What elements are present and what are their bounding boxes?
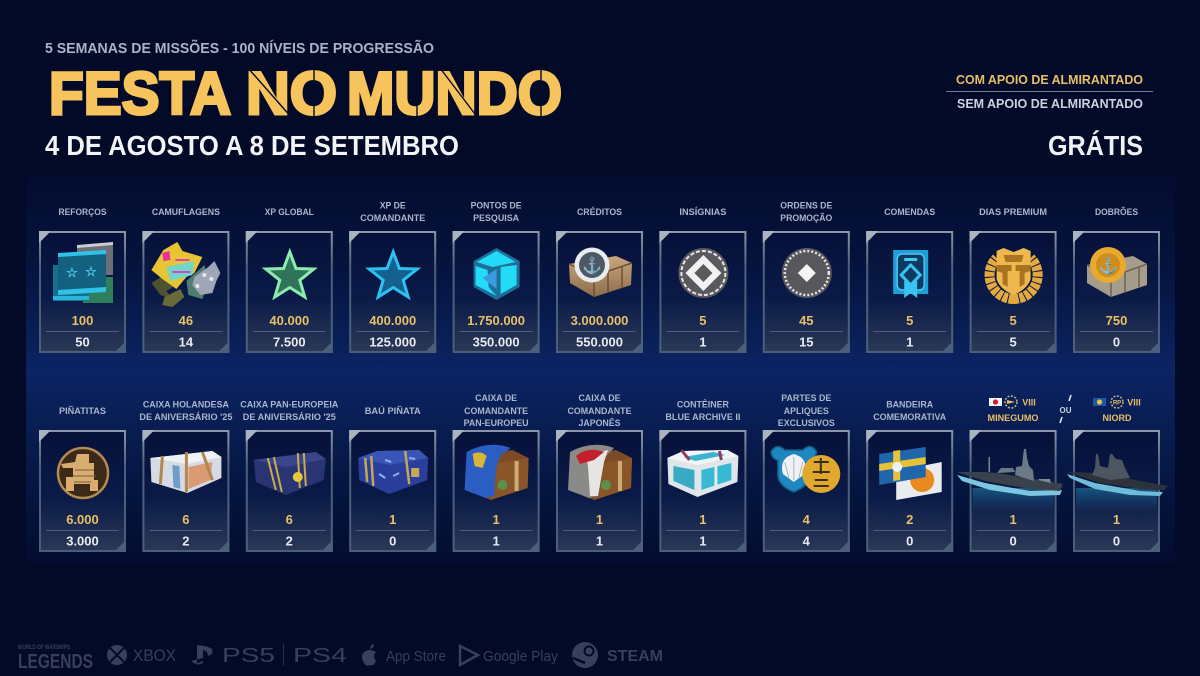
ship: minegumo <box>957 449 1063 496</box>
card: xp de comandante <box>349 201 436 353</box>
card: partes de apliques exclusivos: 4 <box>803 534 811 548</box>
icon: crate with doubloon: ⚓ <box>1098 256 1118 275</box>
card: créditos: 550.000 <box>576 334 623 350</box>
separator: ou: OU <box>1060 406 1072 415</box>
card: comendas: COMENDAS <box>884 207 935 218</box>
header: niord: NIORD <box>1102 413 1132 424</box>
icon: emblem shield and gold patch <box>771 446 840 493</box>
card: xp de comandante: 400.000 <box>369 313 416 328</box>
card: baú piñata <box>349 405 436 552</box>
icon: crate with doubloon <box>1087 247 1147 297</box>
separator: ou <box>1060 395 1072 423</box>
card: ordens de promoção: ORDENS DE <box>780 201 832 212</box>
header: minegumo <box>988 396 1038 424</box>
card: caixa de comandante pan-europeu: CAIXA DE <box>475 393 517 404</box>
card: minegumo: 1 <box>1009 512 1017 527</box>
logo: playstation 5: PS5 <box>222 645 275 667</box>
icon: premium laurel shield <box>990 248 1038 299</box>
card: dias premium <box>970 207 1057 353</box>
card: contêiner blue archive: BLUE ARCHIVE II <box>665 412 740 423</box>
card: reforços: REFORÇOS <box>58 207 106 218</box>
card: pontos de pesquisa: 350.000 <box>473 334 520 350</box>
card: ordens de promoção: 15 <box>799 334 814 350</box>
card: caixa de comandante japonês: COMANDANTE <box>568 406 632 417</box>
card: caixa pan-europeia: 2 <box>286 534 293 548</box>
icon: blue star <box>369 252 417 297</box>
card: camuflagens: 14 <box>179 334 194 350</box>
icon: order medal <box>782 248 832 298</box>
card: minegumo <box>970 430 1057 552</box>
icon: commander chest with blue cloth <box>465 445 529 500</box>
card: dobrões <box>1073 207 1160 353</box>
icon: blue anniversary box <box>254 452 326 495</box>
card: caixa holandesa <box>139 400 233 552</box>
card: insígnias: INSÍGNIAS <box>679 207 726 218</box>
card: baú piñata: BAÚ PIÑATA <box>365 405 421 417</box>
logo: xbox: XBOX <box>133 646 176 665</box>
card: baú piñata: 0 <box>389 534 396 548</box>
card: reforços <box>39 207 126 353</box>
icon: camouflage patches <box>151 242 220 307</box>
logo: app store: App Store <box>386 648 446 665</box>
logo: steam <box>572 642 663 668</box>
card: caixa de comandante pan-europeu: PAN-EUROPEU <box>464 418 529 429</box>
card: caixa holandesa: 6 <box>182 512 190 527</box>
card: piñatitas: 6.000 <box>66 512 99 527</box>
legend: without admiral support: SEM APOIO DE ALMIRANTADO <box>957 96 1143 111</box>
logo: world of warships legends: LEGENDS <box>18 651 93 673</box>
card: pontos de pesquisa <box>453 201 540 353</box>
icon: commendation document <box>893 250 928 298</box>
card: caixa holandesa: DE ANIVERSÁRIO '25 <box>139 412 233 423</box>
icon: piñata chest <box>358 450 428 494</box>
card: baú piñata: 1 <box>389 512 396 527</box>
logo: google play <box>460 646 558 665</box>
background band <box>26 175 1175 565</box>
title <box>49 60 562 127</box>
header: niord: VIII <box>1127 398 1141 408</box>
logo: world of warships legends: WORLD OF WARSHIPS <box>18 645 70 651</box>
card: xp global <box>246 207 333 353</box>
card: bandeira comemorativa: 0 <box>906 534 913 548</box>
card: bandeira comemorativa: BANDEIRA <box>886 400 933 411</box>
icon: signal flags: ☆ <box>66 265 78 280</box>
icon: wooden crate with credit coin: ⚓ <box>582 256 602 275</box>
title: NO <box>246 60 337 127</box>
card: dobrões: DOBRÕES <box>1095 207 1138 218</box>
icon: piñata coin <box>58 448 108 498</box>
card: caixa de comandante pan-europeu: 1 <box>492 512 500 527</box>
card: dias premium: 5 <box>1009 313 1017 328</box>
card: minegumo: 0 <box>1009 534 1017 548</box>
ship: niord <box>1067 454 1168 496</box>
card: niord <box>1073 430 1160 552</box>
card: dobrões: 750 <box>1106 313 1127 328</box>
header: niord: RP <box>1113 400 1121 406</box>
card: caixa de comandante japonês: 1 <box>596 534 603 548</box>
card: caixa holandesa: 2 <box>182 534 190 548</box>
card: niord: 1 <box>1113 512 1120 527</box>
card: reforços: 50 <box>75 334 90 350</box>
card: contêiner blue archive: CONTÊINER <box>677 399 729 411</box>
footer: logos <box>18 642 663 673</box>
icon: signal flags: ☆ <box>85 264 97 279</box>
card: xp de comandante: XP DE <box>380 201 406 212</box>
card: caixa de comandante japonês: JAPONÊS <box>578 417 620 429</box>
card: caixa de comandante japonês: 1 <box>596 512 603 527</box>
card: caixa pan-europeia: 6 <box>286 512 293 527</box>
title: MUNDO <box>347 60 562 127</box>
card: contêiner blue archive: 1 <box>699 534 707 548</box>
card: dias premium: 5 <box>1009 334 1017 350</box>
card: xp global: 40.000 <box>269 313 309 328</box>
icon: research hexagon <box>474 248 520 300</box>
logo: playstation 4: PS4 <box>293 645 347 667</box>
legend: free: GRÁTIS <box>1048 130 1143 161</box>
card: comendas <box>866 207 953 353</box>
card: caixa de comandante japonês: CAIXA DE <box>578 393 620 404</box>
card: pontos de pesquisa: PONTOS DE <box>471 201 522 212</box>
card: créditos: 3.000.000 <box>571 313 628 328</box>
icon: white and cyan container <box>667 450 738 497</box>
header: minegumo: VIII <box>1022 398 1036 408</box>
card: partes de apliques exclusivos <box>763 393 850 552</box>
card: dobrões: 0 <box>1113 334 1120 350</box>
card: pontos de pesquisa: PESQUISA <box>473 213 519 224</box>
logo: world of warships legends <box>18 645 93 673</box>
card: partes de apliques exclusivos: APLIQUES <box>784 406 829 417</box>
card: ordens de promoção <box>763 201 850 353</box>
card: caixa pan-europeia: DE ANIVERSÁRIO '25 <box>243 412 336 423</box>
card: bandeira comemorativa <box>866 400 953 552</box>
icon: badge with diamond <box>678 248 728 298</box>
card: xp de comandante: COMANDANTE <box>360 213 425 224</box>
icon: white anniversary box <box>150 451 221 493</box>
card: partes de apliques exclusivos: PARTES DE <box>781 393 831 404</box>
card: insígnias: 5 <box>699 313 707 328</box>
card: créditos: CRÉDITOS <box>577 207 622 218</box>
logo: app store <box>362 644 446 666</box>
card: ordens de promoção: PROMOÇÃO <box>780 213 832 224</box>
logo: playstation 5 <box>191 645 275 667</box>
card: caixa de comandante pan-europeu: 1 <box>492 534 500 548</box>
card: caixa de comandante pan-europeu: COMANDANTE <box>464 406 528 417</box>
card: partes de apliques exclusivos: EXCLUSIVOS <box>778 418 835 429</box>
card: comendas: 1 <box>906 334 913 350</box>
card: xp global: 7.500 <box>273 334 306 350</box>
header: niord <box>1093 396 1141 424</box>
card: piñatitas <box>39 406 126 552</box>
card: bandeira comemorativa: COMEMORATIVA <box>873 412 946 423</box>
card: caixa de comandante pan-europeu <box>453 393 540 552</box>
card: camuflagens: CAMUFLAGENS <box>152 207 220 218</box>
card: créditos <box>556 207 643 353</box>
icon: commander chest with white cloth <box>568 445 632 500</box>
card: bandeira comemorativa: 2 <box>906 512 913 527</box>
card: reforços: 100 <box>72 313 93 328</box>
title: FESTA <box>49 60 231 127</box>
card: niord: 0 <box>1113 534 1120 548</box>
logo: xbox <box>107 645 176 665</box>
card: contêiner blue archive <box>659 399 746 552</box>
legend: with admiral support: COM APOIO DE ALMIRANTADO <box>956 72 1143 87</box>
divider <box>283 644 284 666</box>
icon: signal flags <box>53 242 113 303</box>
icon: commemorative flags <box>879 447 942 500</box>
card: xp global: XP GLOBAL <box>265 207 314 218</box>
card: piñatitas: PIÑATITAS <box>59 406 106 417</box>
date: 4 DE AGOSTO A 8 DE SETEMBRO <box>45 130 459 161</box>
card: insígnias <box>659 207 746 353</box>
header: minegumo: MINEGUMO <box>988 413 1038 424</box>
logo: google play: Google Play <box>483 648 558 665</box>
card: dias premium: DIAS PREMIUM <box>979 207 1047 218</box>
card: caixa pan-europeia <box>240 400 338 552</box>
card: caixa holandesa: CAIXA HOLANDESA <box>143 400 229 411</box>
card: piñatitas: 3.000 <box>66 534 99 548</box>
card: partes de apliques exclusivos: 4 <box>803 512 811 527</box>
card: comendas: 5 <box>906 313 913 328</box>
card: camuflagens: 46 <box>179 313 193 328</box>
card: insígnias: 1 <box>699 334 707 350</box>
subtitle: 5 SEMANAS DE MISSÕES - 100 NÍVEIS DE PROGRESSÃO <box>45 39 434 57</box>
card: camuflagens <box>142 207 229 353</box>
card: caixa pan-europeia: CAIXA PAN-EUROPEIA <box>240 400 338 411</box>
logo: steam: STEAM <box>607 648 663 665</box>
card: caixa de comandante japonês <box>556 393 643 552</box>
card: ordens de promoção: 45 <box>799 313 814 328</box>
card: xp de comandante: 125.000 <box>369 334 416 350</box>
card: pontos de pesquisa: 1.750.000 <box>467 313 525 328</box>
card: contêiner blue archive: 1 <box>699 512 707 527</box>
icon: wooden crate with credit coin <box>569 248 632 297</box>
icon: green star <box>266 252 314 297</box>
